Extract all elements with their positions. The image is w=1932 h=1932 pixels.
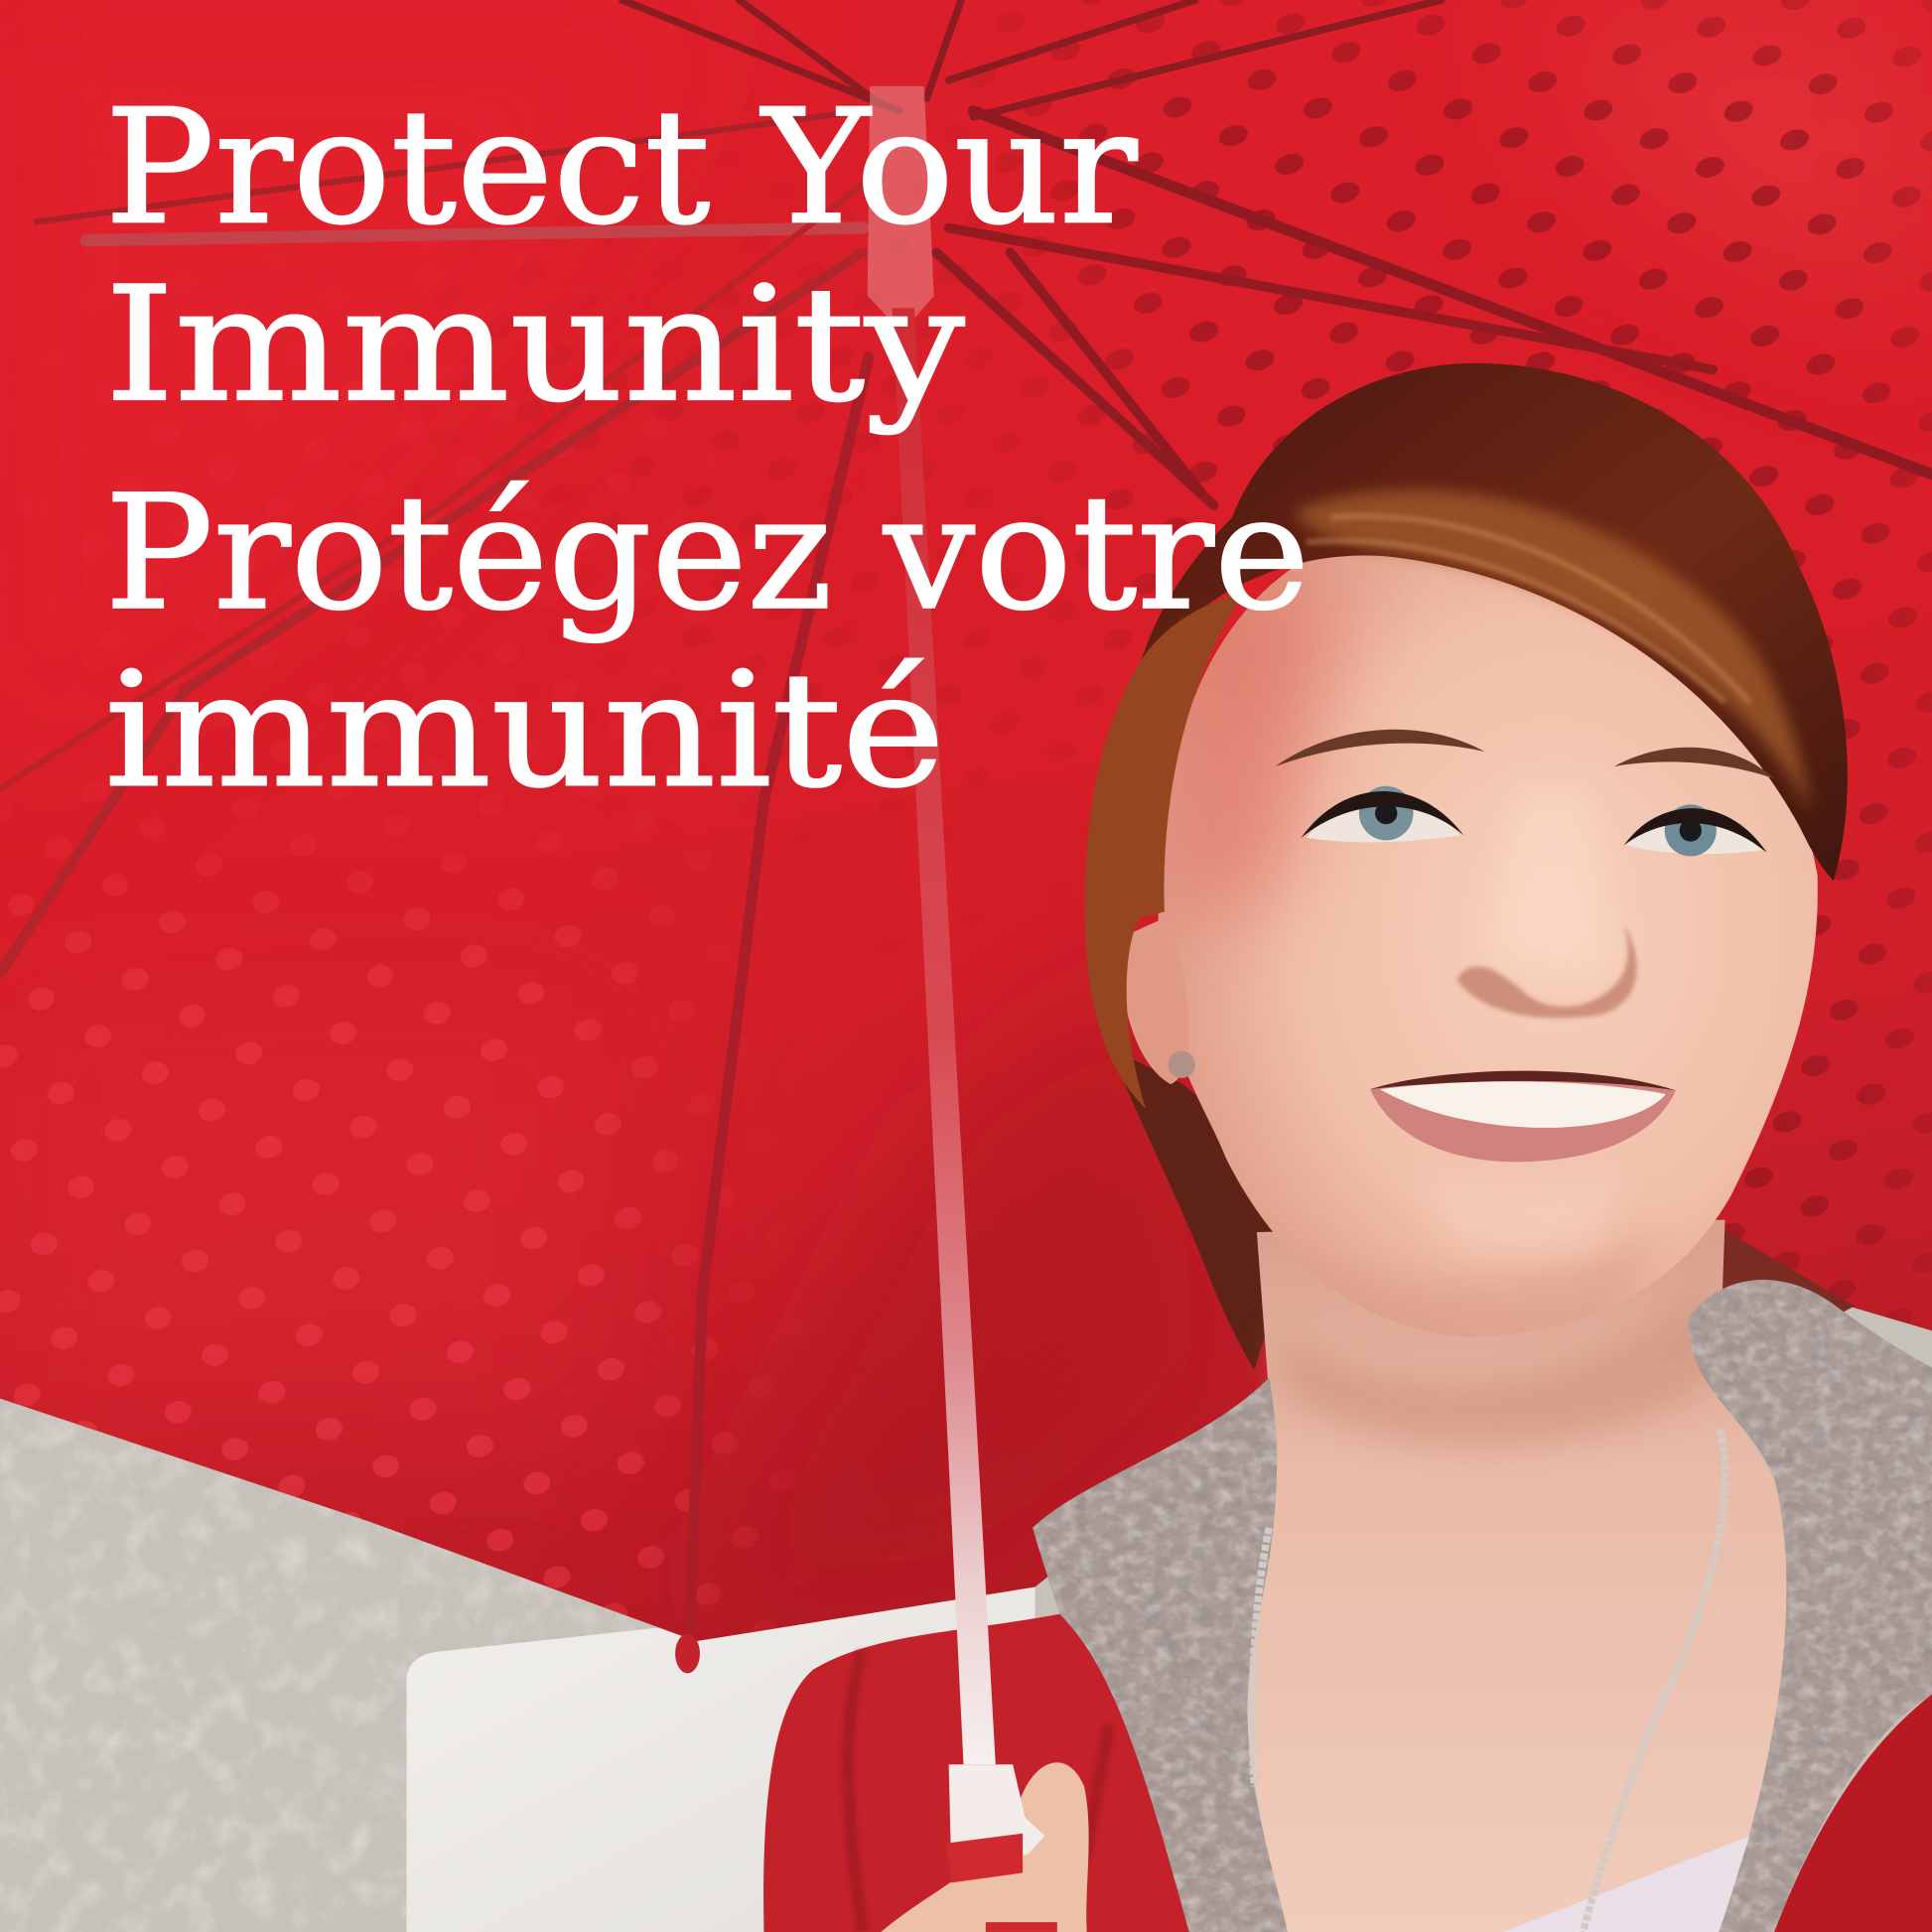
hair streak lines — [1307, 516, 1749, 702]
hair top and fringe — [1140, 363, 1848, 881]
sweater hood — [1033, 1280, 1932, 1932]
woman — [763, 363, 1932, 1932]
hand — [881, 1762, 1089, 1932]
left eye — [1302, 786, 1463, 842]
jacket left — [763, 1614, 1189, 1932]
undershirt — [1503, 1836, 1749, 1932]
title: Protégez votre: Protégez votre — [104, 463, 1310, 645]
umbrella tip — [675, 1634, 700, 1673]
neck — [1244, 1220, 1799, 1932]
hair golden streaks — [1294, 490, 1811, 813]
title — [104, 76, 1310, 823]
hair left strands — [1085, 592, 1244, 1109]
necklace — [1252, 1430, 1725, 1932]
umbrella shaft — [893, 308, 996, 1764]
jacket right — [1774, 1694, 1932, 1932]
umbrella handle — [946, 1764, 1057, 1932]
mouth — [1370, 1071, 1676, 1162]
white block behind — [407, 1587, 1035, 1932]
umbrella hub — [868, 86, 934, 333]
canopy shading — [280, 9, 1922, 1640]
back hair — [1109, 1047, 1294, 1370]
ear — [1121, 918, 1188, 1084]
right eye — [1624, 804, 1767, 857]
eyebrows — [1276, 730, 1774, 778]
face — [1159, 524, 1818, 1337]
face warm shading — [1171, 579, 1663, 1368]
nose — [1456, 924, 1637, 1018]
title: immunité: immunité — [104, 640, 945, 823]
title: Immunity: Immunity — [104, 254, 965, 437]
title: Protect Your: Protect Your — [104, 76, 1138, 259]
